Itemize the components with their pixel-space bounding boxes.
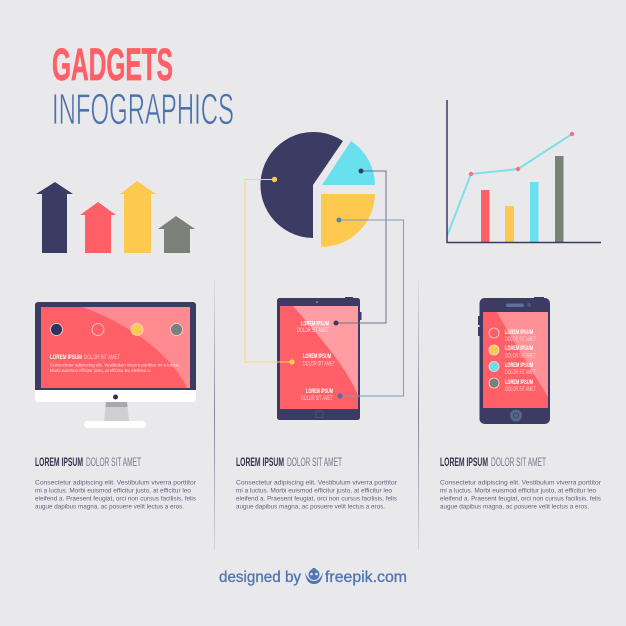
text block: middle column: mi a luctus. Morbi euismod efficitur justo, at efficitur leo	[236, 488, 392, 494]
connector: yellow	[245, 177, 295, 365]
phone: LOREM IPSUM	[505, 380, 533, 386]
tablet: LOREM IPSUM	[301, 322, 329, 328]
monitor: DOLOR SIT AMET	[84, 354, 120, 361]
title: INFOGRAPHICS	[52, 86, 234, 134]
footer credit	[219, 568, 407, 586]
text block: right column: Consectetur adipiscing elit. Vestibulum viverra porttitor	[440, 480, 602, 486]
footer credit: designed by	[219, 569, 301, 586]
dividers	[214, 280, 419, 550]
tablet: DOLOR SIT AMET	[297, 328, 329, 334]
phone: LOREM IPSUM	[505, 330, 533, 336]
phone: DOLOR SIT AMET	[505, 337, 536, 343]
tablet: LOREM IPSUM	[303, 354, 331, 360]
icon: freepik logo	[305, 568, 323, 584]
arrow bar chart	[36, 181, 195, 253]
text block: right column: mi a luctus. Morbi euismod efficitur justo, at efficitur leo	[440, 488, 596, 494]
title: GADGETS	[52, 39, 173, 90]
text block: right column: LOREM IPSUM	[440, 457, 488, 469]
text block: left column: mi a luctus. Morbi euismod efficitur justo, at efficitur leo	[35, 488, 191, 494]
monitor	[35, 302, 196, 428]
text block: left column: LOREM IPSUM	[35, 457, 83, 469]
text block: left column: DOLOR SIT AMET	[86, 457, 141, 469]
monitor: Consectetur adipiscing elit. Vestibulum viverra porttitor mi a luctus.	[50, 362, 180, 368]
phone: DOLOR SIT AMET	[505, 387, 536, 393]
text block: middle column: LOREM IPSUM	[236, 457, 284, 469]
text block: right column: eleifend a. Praesent feugiat, orci non cursus facilisis, felis	[440, 496, 602, 502]
monitor: Morbi euismod efficitur justo, at efficitur leo eleifend a.	[50, 368, 151, 373]
text block: right column: DOLOR SIT AMET	[491, 457, 546, 469]
text block: middle column: Consectetur adipiscing elit. Vestibulum viverra porttitor	[236, 480, 398, 486]
text block: middle column	[236, 457, 398, 510]
tablet: DOLOR SIT AMET	[301, 396, 333, 402]
tablet	[277, 297, 362, 420]
text block: middle column: eleifend a. Praesent feugiat, orci non cursus facilisis, felis	[236, 496, 398, 502]
text block: middle column: DOLOR SIT AMET	[287, 457, 342, 469]
phone: LOREM IPSUM	[505, 346, 533, 352]
title	[52, 39, 234, 134]
phone	[478, 297, 550, 424]
phone: DOLOR SIT AMET	[505, 354, 536, 360]
text block: left column: eleifend a. Praesent feugiat, orci non cursus facilisis, felis	[35, 496, 197, 502]
text block: left column: Consectetur adipiscing elit. Vestibulum viverra porttitor	[35, 480, 197, 486]
line and bar chart	[447, 100, 601, 242]
pie chart	[260, 132, 375, 247]
connector: navy	[334, 168, 386, 326]
text block: right column	[440, 457, 602, 510]
text block: middle column: augue dapibus magna, ac posuere velit lectus a eros.	[236, 504, 385, 510]
tablet: LOREM IPSUM	[306, 389, 333, 395]
text block: right column: augue dapibus magna, ac posuere velit lectus a eros.	[440, 504, 589, 510]
connector: blue	[336, 218, 404, 398]
tablet: DOLOR SIT AMET	[303, 362, 335, 368]
phone: LOREM IPSUM	[505, 363, 533, 369]
monitor: LOREM IPSUM	[50, 354, 82, 361]
text block: left column	[35, 457, 197, 510]
footer credit: freepik.com	[325, 569, 407, 586]
phone: DOLOR SIT AMET	[505, 370, 536, 376]
text block: left column: augue dapibus magna, ac posuere velit lectus a eros.	[35, 504, 184, 510]
